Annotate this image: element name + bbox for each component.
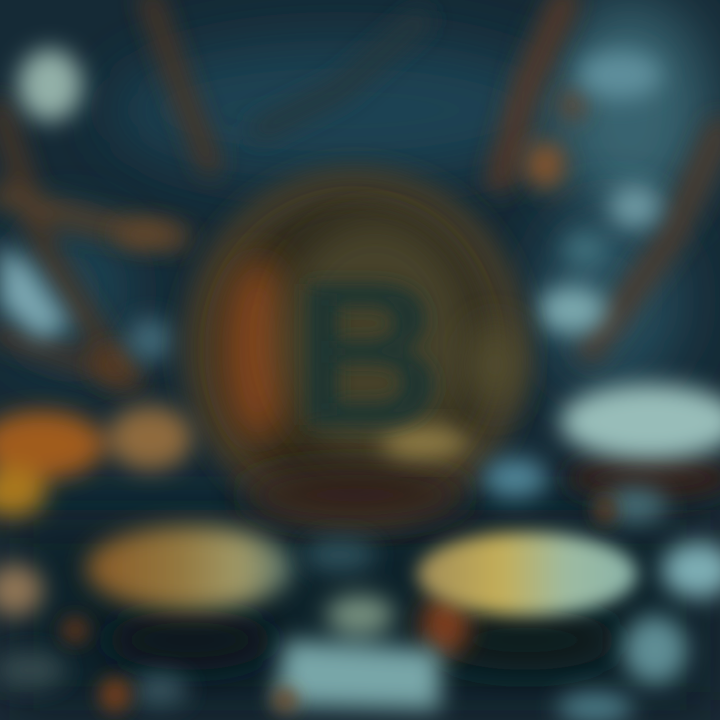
gold coins left (0, 406, 192, 616)
coin highlight (381, 426, 469, 460)
bitcoin symbol: B (294, 240, 442, 469)
large gold coin centre left (86, 526, 294, 670)
large gold coin centre right (417, 532, 637, 670)
small silver tiles (0, 458, 720, 720)
coin rim (181, 166, 529, 530)
silver coin right (560, 384, 720, 502)
chains (0, 0, 720, 380)
coin left copper crescent (222, 258, 294, 442)
coin lower rim shadow (240, 469, 470, 521)
light bokeh spots (0, 49, 662, 362)
chain highlights (93, 90, 585, 383)
coin face (280, 220, 470, 460)
small copper accents (61, 496, 615, 713)
coin inner shadow ring (214, 202, 490, 498)
bitcoin coin (181, 166, 529, 530)
